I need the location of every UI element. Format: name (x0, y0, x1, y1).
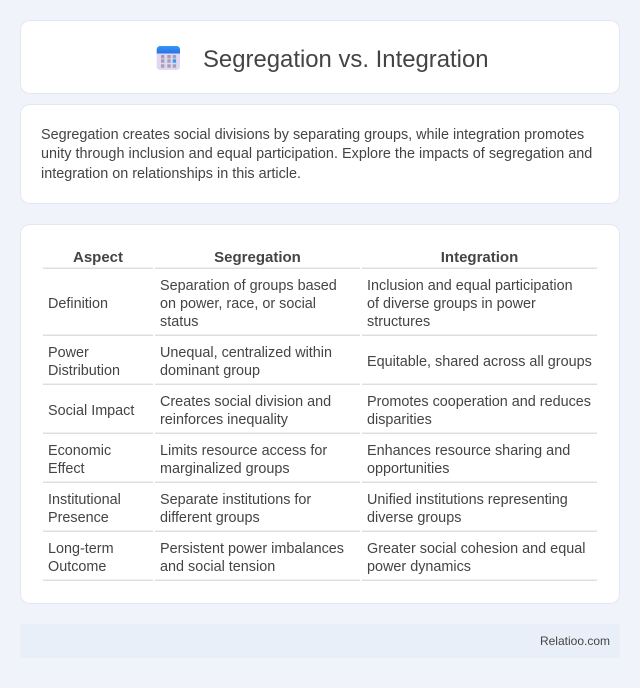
row: Power Distribution: Equitable, shared across all groups (367, 354, 592, 370)
row: Definition (43, 278, 597, 336)
table header: Integration (441, 249, 518, 266)
row: Economic Effect: Limits resource access for (160, 443, 327, 459)
row: Social Impact: reinforces inequality (160, 412, 288, 428)
row: Institutional Presence: diverse groups (367, 510, 461, 526)
table header: Aspect (73, 249, 123, 266)
row: Definition: on power, race, or social (160, 296, 316, 312)
icon: calendar (156, 46, 180, 70)
row: Social Impact: disparities (367, 412, 432, 428)
row: Definition: of diverse groups in power (367, 296, 536, 312)
row: Economic Effect: Enhances resource sharing and (367, 443, 570, 459)
table header: Segregation (214, 249, 301, 266)
panel: introduction (20, 104, 620, 204)
row: Long-term Outcome: Persistent power imbalances (160, 541, 344, 557)
row: Social Impact: Creates social division and (160, 394, 331, 410)
footer bar (20, 624, 620, 658)
row: Long-term Outcome: Greater social cohesion and equal (367, 541, 585, 557)
row: Economic Effect: marginalized groups (160, 461, 290, 477)
row: Power Distribution: dominant group (160, 363, 260, 379)
row: Definition: status (160, 314, 198, 330)
intro text: unity through inclusion and equal participation. Explore the impacts of segregation and (41, 146, 592, 162)
intro text: integration on relationships in this article. (41, 166, 301, 182)
intro text (41, 127, 592, 182)
row: Institutional Presence: Presence (48, 510, 109, 526)
row: Institutional Presence (43, 492, 597, 532)
row: Economic Effect: Effect (48, 461, 85, 477)
row: Social Impact (43, 394, 597, 434)
title: Segregation vs. Integration (203, 46, 489, 73)
row: Social Impact: Promotes cooperation and reduces (367, 394, 591, 410)
row: Long-term Outcome: power dynamics (367, 559, 471, 575)
row: Long-term Outcome: Long-term (48, 541, 114, 557)
row: Institutional Presence: Separate institutions for (160, 492, 311, 508)
row: Definition: Separation of groups based (160, 278, 337, 294)
row: Power Distribution: Distribution (48, 363, 120, 379)
row: Power Distribution: Unequal, centralized within (160, 345, 332, 361)
panel: title card (20, 20, 620, 94)
row: Power Distribution (43, 345, 597, 385)
row: Economic Effect (43, 443, 597, 483)
row: Definition: Inclusion and equal participation (367, 278, 573, 294)
comparison table (43, 249, 597, 581)
intro text: Segregation creates social divisions by separating groups, while integration promotes (41, 127, 584, 143)
row: Institutional Presence: Institutional (48, 492, 121, 508)
row: Power Distribution: Power (48, 345, 89, 361)
row: Institutional Presence: Unified institutions representing (367, 492, 568, 508)
row: Definition: structures (367, 314, 430, 330)
row: Economic Effect: Economic (48, 443, 111, 459)
row: Long-term Outcome (43, 541, 597, 581)
table header (43, 249, 597, 269)
row: Social Impact: Social Impact (48, 403, 134, 419)
panel: comparison table (20, 224, 620, 604)
row: Long-term Outcome: and social tension (160, 559, 275, 575)
row: Institutional Presence: different groups (160, 510, 260, 526)
row: Long-term Outcome: Outcome (48, 559, 106, 575)
footer credit: Relatioo.com (540, 634, 610, 648)
row: Economic Effect: opportunities (367, 461, 449, 477)
row: Definition: Definition (48, 296, 108, 312)
